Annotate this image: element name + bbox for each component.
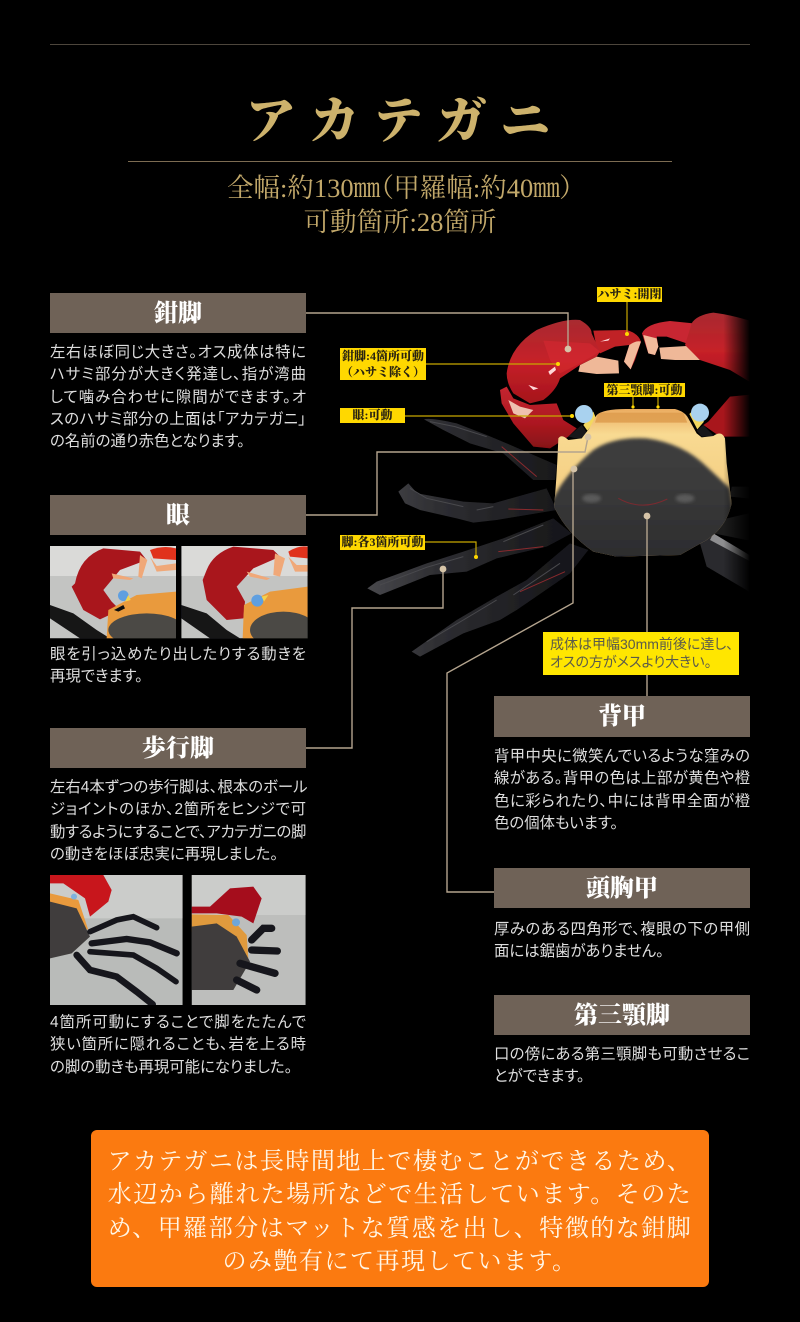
label: legs: 脚:各3箇所可動 <box>342 535 424 549</box>
heading: cephalothorax: 頭胸甲 <box>586 876 658 902</box>
callout dots <box>440 346 650 572</box>
text: carapace <box>494 748 750 832</box>
text: eyes: 眼を引っ込めたり出したりする動きを <box>50 646 306 663</box>
heading: walking legs: 歩行脚 <box>142 736 214 762</box>
callout: size note <box>543 632 739 675</box>
heading: walking legs <box>50 728 306 768</box>
panel: habitat note: のみ艶有にて再現しています。 <box>222 1249 578 1275</box>
text: articulation note: 4箇所可動にすることで脚をたたんで <box>50 1014 306 1031</box>
panel: habitat note: 水辺から離れた場所などで生活しています。そのた <box>108 1182 692 1208</box>
heading: carapace <box>494 696 750 737</box>
label: claw leg articulation <box>340 348 426 380</box>
text: carapace: 線がある。背甲の色は上部が黄色や橙 <box>494 770 750 787</box>
text: walking legs: 左右4本ずつの歩行脚は、根本のボール <box>50 779 308 796</box>
left claw <box>500 320 641 448</box>
text: claw legs: の名前の通り赤色となります。 <box>50 433 245 450</box>
photos: walking legs <box>50 875 306 1005</box>
text: eyes: 再現できます。 <box>50 668 143 685</box>
text: claw legs: 左右ほぼ同じ大きさ。オス成体は特に <box>50 344 306 361</box>
text: walking legs: の動きをほぼ忠実に再現しました。 <box>50 846 278 863</box>
text: third maxilliped <box>494 1046 750 1085</box>
text: articulation note <box>50 1014 306 1076</box>
text: walking legs: 動するようにすることで、アカテガニの脚 <box>50 824 306 841</box>
text: cephalothorax: 面には鋸歯がありません。 <box>494 943 664 960</box>
title: アカテガニ <box>246 93 564 149</box>
text: claw legs: ハサミ部分が大きく発達し、指が湾曲 <box>50 366 306 383</box>
photos: eyes <box>50 546 308 638</box>
text: articulation note: の脚の動きも再現可能になりました。 <box>50 1059 292 1076</box>
label: claw leg articulation: 鉗脚:4箇所可動 <box>342 349 424 363</box>
carapace <box>554 409 732 557</box>
heading: third maxilliped <box>494 995 750 1035</box>
text: carapace: 背甲中央に微笑んでいるような窪みの <box>494 748 750 765</box>
text: third maxilliped: 口の傍にある第三顎脚も可動させるこ <box>494 1046 750 1063</box>
heading: cephalothorax <box>494 868 750 908</box>
heading: third maxilliped: 第三顎脚 <box>574 1003 670 1029</box>
label: claw open/close: ハサミ:開閉 <box>598 287 662 301</box>
eyes <box>568 404 714 439</box>
heading: claw legs <box>50 293 306 333</box>
text: articulation note: 狭い箇所に隠れることも、岩を上る時 <box>50 1036 306 1053</box>
text: claw legs: スのハサミ部分の上面は「アカテガニ」 <box>50 411 306 428</box>
subtitle: size and articulation <box>227 173 573 237</box>
label: claw leg articulation: （ハサミ除く） <box>341 365 425 379</box>
callout: size note: 成体は甲幅30mm前後に達し、 <box>550 636 733 652</box>
crab illustration <box>367 280 790 657</box>
text: cephalothorax <box>494 920 750 960</box>
walking legs <box>367 419 763 657</box>
heading: claw legs: 鉗脚 <box>154 301 202 327</box>
text: claw legs: して噛み合わせに隙間ができます。オ <box>50 389 306 406</box>
yellow leader lines <box>405 302 658 557</box>
subtitle: size and articulation: 全幅:約130㎜（甲羅幅:約40㎜） <box>227 173 573 203</box>
connector lines <box>306 313 647 892</box>
callout: size note: オスの方がメスより大きい。 <box>550 654 712 670</box>
text: walking legs: ジョイントのほか、2箇所をヒンジで可 <box>50 801 306 818</box>
text: claw legs <box>50 344 306 450</box>
label: eyes: 眼:可動 <box>352 408 392 422</box>
label: eyes <box>340 408 405 423</box>
text: carapace: 色の個体もいます。 <box>494 815 618 832</box>
right claw <box>642 313 763 437</box>
heading: carapace: 背甲 <box>598 704 646 730</box>
heading: eyes: 眼 <box>166 503 190 529</box>
heading: eyes <box>50 495 306 535</box>
yellow dots <box>474 332 660 559</box>
panel: habitat note: め、甲羅部分はマットな質感を出し、特徴的な鉗脚 <box>108 1216 692 1242</box>
text: eyes <box>50 646 306 685</box>
subtitle: size and articulation: 可動箇所:28箇所 <box>304 207 496 237</box>
panel: habitat note: アカテガニは長時間地上で棲むことができるため、 <box>108 1149 692 1175</box>
panel: habitat note <box>91 1130 709 1287</box>
text: cephalothorax: 厚みのある四角形で、複眼の下の甲側 <box>494 921 750 938</box>
label: third maxilliped: 第三顎脚:可動 <box>606 382 682 396</box>
text: carapace: 色に彩られたり、中には背甲全面が橙 <box>494 793 750 810</box>
text: walking legs <box>50 778 308 863</box>
text: third maxilliped: とができます。 <box>494 1068 585 1085</box>
